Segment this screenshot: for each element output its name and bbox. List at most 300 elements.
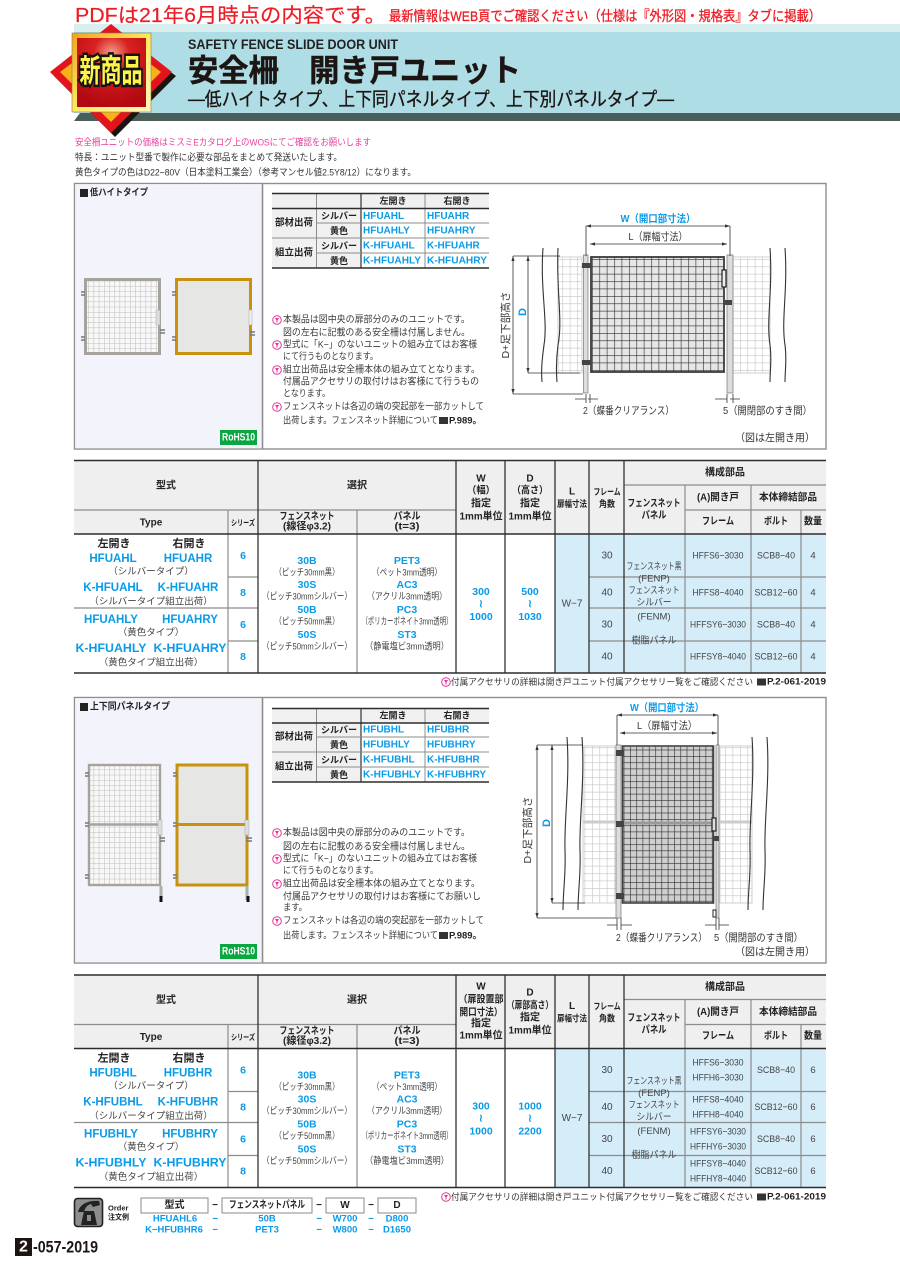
page number <box>15 1238 98 1256</box>
small model table: 部材出荷 <box>275 216 313 228</box>
order header boxes: − <box>368 1200 374 1211</box>
selection columns: （ペット3mm透明） <box>372 566 442 578</box>
selection columns: （静電塩ビ3mm透明） <box>365 1155 449 1167</box>
header labels: シリーズ <box>231 1032 255 1042</box>
header labels: 構成部品 <box>705 466 745 478</box>
order header boxes: − <box>316 1200 322 1211</box>
selection columns: 30S <box>298 579 316 591</box>
parts columns: フェンスネット黒 <box>626 1076 682 1087</box>
intro text: 特長：ユニット型番で製作に必要な部品をまとめて発送いたします。 <box>75 152 342 164</box>
size ranges: ≀ <box>479 1112 483 1124</box>
model column: （シルバータイプ） <box>108 1080 194 1092</box>
model column: （シルバータイプ組立出荷） <box>89 596 213 608</box>
order header boxes: フェンスネットパネル <box>229 1199 305 1211</box>
parts columns: 6 <box>810 1102 816 1113</box>
notes list <box>273 314 484 426</box>
small model table: HFUAHLY <box>363 226 410 236</box>
small model table: シルバー <box>321 241 357 251</box>
size ranges: 300 <box>472 586 490 598</box>
header labels: 角数 <box>599 1012 615 1024</box>
model column: 右開き <box>172 1050 206 1064</box>
header labels: (線径φ3.2) <box>283 520 331 532</box>
header labels: 指定 <box>520 496 540 510</box>
parts columns: SCB8−40 <box>757 1134 795 1145</box>
notes list: 組立出荷品は安全柵本体の組み立てとなります。 <box>283 364 480 376</box>
header labels: フェンスネット <box>280 1025 334 1037</box>
parts columns: 4 <box>810 588 816 598</box>
header labels: シリーズ <box>231 518 255 528</box>
small model table: K-HFUAHRY <box>427 256 487 266</box>
panel: low height type <box>74 184 826 449</box>
posts <box>584 255 733 393</box>
model column: K-HFUAHRY <box>154 643 227 655</box>
small model table: K-HFUAHL <box>363 240 415 252</box>
parts columns: (FENM) <box>637 612 671 622</box>
parts columns: 30 <box>601 550 613 562</box>
door mesh <box>622 746 714 903</box>
size ranges: 1030 <box>518 611 542 623</box>
selection columns: （ポリカーボネイト3mm透明） <box>362 616 452 628</box>
order header boxes: − <box>212 1200 218 1211</box>
header labels: フェンスネット <box>628 498 680 510</box>
parts columns: HFFHY8−4040 <box>690 1174 746 1184</box>
model column: K-HFUAHLY <box>76 643 147 655</box>
notes list: ます。 <box>283 902 307 914</box>
model column: （シルバータイプ） <box>108 566 194 578</box>
order header boxes <box>141 1198 416 1213</box>
selection columns: （ポリカーボネイト3mm透明） <box>362 1130 452 1142</box>
model column: HFUAHLY <box>84 614 138 626</box>
header labels: 型式 <box>156 993 176 1006</box>
panel: same upper and lower panel type <box>74 698 826 963</box>
intro text <box>75 136 416 178</box>
header labels: （扉設置部 <box>458 992 504 1006</box>
header labels: 扉幅寸法 <box>557 1012 587 1024</box>
selection columns: （ピッチ50mmシルバー） <box>262 640 352 652</box>
model column: 左開き <box>98 1050 130 1064</box>
header labels: （幅） <box>467 484 495 496</box>
parts columns: 30 <box>601 1065 613 1076</box>
model column: HFUAHL <box>89 553 137 565</box>
header labels: L <box>569 1001 575 1012</box>
header labels: 数量 <box>804 514 822 528</box>
notes list: 型式に「K−」のないユニットの組み立てはお客様 <box>283 338 477 350</box>
notice line: PDF date <box>75 4 821 27</box>
header labels: L <box>569 486 575 498</box>
selection columns: PC3 <box>397 604 417 616</box>
header labels: W <box>476 474 486 484</box>
small model table: K-HFUAHLY <box>363 256 421 266</box>
small model table: HFUBHRY <box>427 740 476 750</box>
size ranges: 2200 <box>518 1126 542 1138</box>
size ranges: 1000 <box>469 1126 493 1138</box>
door diagram: tall: D+足下部高さ <box>521 796 534 864</box>
small model table: シルバー <box>321 725 357 735</box>
page number: -057-2019 <box>33 1238 98 1256</box>
header labels: パネル <box>642 1024 666 1036</box>
parts columns: HFFSY8−4040 <box>690 652 746 662</box>
order example values: − <box>212 1224 218 1236</box>
title block: SAFETY FENCE SLIDE DOOR UNIT <box>188 36 398 52</box>
order example values: PET3 <box>255 1224 279 1236</box>
door diagram: tall: W（開口部寸法） <box>630 701 704 714</box>
header labels: パネル <box>394 1025 420 1037</box>
small model table: 部材出荷 <box>275 730 313 742</box>
selection columns: PET3 <box>394 1070 420 1082</box>
notes list: 本製品は図中央の扉部分のみのユニットです。 <box>283 314 470 326</box>
model column: HFUBHLY <box>84 1128 138 1140</box>
selection columns: AC3 <box>396 1094 418 1106</box>
selection columns: （アクリル3mm透明） <box>367 1105 447 1117</box>
small model table: 組立出荷 <box>275 760 313 772</box>
model column: HFUAHRY <box>162 614 218 626</box>
door diagram: low height: 5（開閉部のすき間） <box>723 405 812 417</box>
parts columns: SCB12−60 <box>754 1166 798 1177</box>
model column <box>76 536 246 668</box>
header labels: 1mm単位 <box>508 510 552 522</box>
selection columns: （ピッチ30mm黒） <box>274 566 340 578</box>
parts columns: (FENP) <box>638 574 670 584</box>
parts columns: 樹脂パネル <box>632 634 677 646</box>
model column: 8 <box>240 587 246 599</box>
size ranges: 1000 <box>469 611 493 623</box>
photo: silver fence door tall <box>85 765 165 902</box>
model column: 6 <box>240 619 246 631</box>
header labels: 指定 <box>520 1010 540 1024</box>
header labels: Type <box>140 518 163 528</box>
door diagram: tall: （図は左開き用） <box>735 945 815 958</box>
order example values: − <box>368 1214 374 1224</box>
header labels: (t=3) <box>394 1036 420 1047</box>
door diagram: low height <box>499 212 815 444</box>
RoHS badge: RoHS10 <box>222 946 255 958</box>
header labels: パネル <box>642 510 666 522</box>
parts columns: 6 <box>810 1065 816 1076</box>
notes list: 本製品は図中央の扉部分のみのユニットです。 <box>283 826 470 838</box>
parts columns: SCB12−60 <box>754 652 798 662</box>
model column: K-HFUBHR <box>158 1096 219 1108</box>
hinges and latch <box>616 750 719 899</box>
selection columns: ST3 <box>397 629 417 641</box>
small model table: HFUAHL <box>363 211 404 222</box>
model column: 6 <box>240 1064 246 1076</box>
small model table: K-HFUAHR <box>427 240 481 252</box>
header band <box>74 24 900 121</box>
door diagram: low height: （図は左開き用） <box>735 431 815 444</box>
notes list: P.989。 <box>449 416 482 426</box>
notes list: 付属品アクセサリの取付けはお客様にてお願いし <box>283 890 481 902</box>
parts columns: SCB8−40 <box>757 620 795 630</box>
model column: （シルバータイプ組立出荷） <box>89 1110 213 1122</box>
size ranges: 500 <box>521 586 539 598</box>
notes list: 付属品アクセサリの取付けはお客様にて行うもの <box>283 376 479 388</box>
notice line: PDF date: PDFは21年6月時点の内容です。 <box>75 4 386 27</box>
selection columns: ST3 <box>397 1144 417 1156</box>
door diagram: tall: L（扉幅寸法） <box>637 719 697 732</box>
title block: —低ハイトタイプ、上下同パネルタイプ、上下別パネルタイプ— <box>188 88 674 110</box>
parts columns <box>601 550 816 662</box>
selection columns: （ピッチ30mmシルバー） <box>262 590 352 602</box>
order example values: − <box>368 1224 374 1236</box>
small model table: 黄色 <box>330 225 348 236</box>
small model table: 右開き <box>443 710 471 720</box>
parts columns: 6 <box>810 1166 816 1177</box>
header labels <box>140 466 822 532</box>
header labels: 構成部品 <box>705 980 745 993</box>
small model table: HFUBHR <box>427 724 470 736</box>
notes list: にて行うものとなります。 <box>283 864 378 876</box>
model column: K-HFUAHR <box>158 582 219 594</box>
header labels: フレーム <box>702 1030 734 1042</box>
door diagram: tall: D <box>541 819 553 827</box>
door diagram: tall: 2（蝶番クリアランス） <box>616 931 707 944</box>
order header boxes: D <box>393 1200 401 1211</box>
header labels: 指定 <box>471 496 491 510</box>
parts columns: 40 <box>601 652 613 662</box>
small model table: HFUBHLY <box>363 740 410 750</box>
order label: 注文例 <box>108 1212 129 1222</box>
order example values: D1650 <box>383 1224 411 1236</box>
selection columns <box>262 555 452 652</box>
size ranges <box>469 1100 583 1138</box>
selection columns: （ピッチ30mmシルバー） <box>262 1105 352 1117</box>
header labels: (A)開き戸 <box>697 1006 739 1018</box>
small model table: 組立出荷 <box>275 246 313 258</box>
parts columns: HFFSY6−3030 <box>690 1126 746 1138</box>
icon: telephone <box>74 1198 102 1226</box>
model column: （黄色タイプ組立出荷） <box>99 1171 203 1183</box>
model column: （黄色タイプ） <box>118 1141 184 1153</box>
photo: yellow panel door tall <box>173 765 252 902</box>
selection columns: （ペット3mm透明） <box>372 1081 442 1093</box>
selection columns: （静電塩ビ3mm透明） <box>365 640 449 652</box>
header labels: パネル <box>394 510 420 522</box>
table footnote 2: P.2-061-2019 <box>767 1192 826 1202</box>
header labels: 扉幅寸法 <box>557 498 587 509</box>
header labels: （高さ） <box>512 484 548 496</box>
notes list: 出荷します。フェンスネット詳細について <box>283 930 438 942</box>
selection columns: 30S <box>298 1094 316 1106</box>
header labels: 数量 <box>804 1029 822 1042</box>
model column: 6 <box>240 550 246 562</box>
spec table: same panel type <box>74 974 826 1188</box>
left and right background fence <box>542 248 786 382</box>
parts columns: フェンスネット <box>628 586 680 596</box>
door diagram: low height: 2（蝶番クリアランス） <box>583 404 674 417</box>
order example <box>74 1198 416 1236</box>
parts columns: フェンスネット <box>628 1100 680 1111</box>
order example values <box>145 1214 411 1236</box>
header labels: フェンスネット <box>628 1012 680 1024</box>
header labels: フレーム <box>702 516 734 528</box>
small model table: HFUAHRY <box>427 226 476 236</box>
header labels: (t=3) <box>394 522 420 532</box>
photo: silver fence door <box>81 280 165 354</box>
header labels: ボルト <box>764 1030 788 1042</box>
small model table: 左開き <box>379 195 407 206</box>
selection columns <box>262 1070 452 1167</box>
parts columns: HFFSY6−3030 <box>690 620 746 630</box>
parts columns: 4 <box>810 652 816 662</box>
hinges and latch <box>582 263 732 365</box>
header labels: 開口寸法） <box>460 1006 502 1018</box>
table footnote 1: 付属アクセサリの詳細は開き戸ユニット付属アクセサリー覧をご確認ください <box>451 676 753 687</box>
small model table: K-HFUBHLY <box>363 770 421 780</box>
parts columns: SCB12−60 <box>754 588 798 598</box>
panel heading: 上下同パネルタイプ <box>90 700 170 712</box>
selection columns: PET3 <box>394 555 420 567</box>
title block: 安全柵 開き戸ユニット <box>188 54 521 88</box>
parts columns: 40 <box>601 588 613 598</box>
size ranges: ≀ <box>479 598 483 610</box>
header labels: フレーム <box>594 1002 620 1012</box>
photo: yellow panel door <box>172 280 255 354</box>
size ranges: W−7 <box>562 598 583 610</box>
order label <box>108 1204 129 1222</box>
order example values: − <box>316 1224 322 1236</box>
header labels <box>140 980 822 1047</box>
model column: 8 <box>240 1102 246 1114</box>
header labels: W <box>476 982 486 992</box>
size ranges: ≀ <box>528 1112 532 1124</box>
model column: 右開き <box>172 536 206 550</box>
header labels: 1mm単位 <box>460 1028 502 1042</box>
door diagram: low height: D <box>517 308 529 316</box>
RoHS badge <box>220 430 257 445</box>
size ranges <box>469 586 583 623</box>
selection columns: PC3 <box>397 1118 417 1130</box>
order example values: − <box>316 1214 322 1224</box>
parts columns: シルバー <box>636 598 672 608</box>
parts columns: 30 <box>601 620 613 630</box>
left and right background fence <box>563 737 768 910</box>
parts columns: 40 <box>601 1102 613 1113</box>
small model table: シルバー <box>321 211 357 221</box>
parts columns: 6 <box>810 1134 816 1145</box>
intro text: 安全柵ユニットの価格はミスミEカタログ上のWOSにてご確認をお願いします <box>75 136 371 148</box>
parts columns: SCB8−40 <box>757 550 795 562</box>
selection columns: 30B <box>297 555 317 567</box>
table footnote 1: P.2-061-2019 <box>767 676 826 688</box>
header labels: フレーム <box>594 487 620 497</box>
dimension lines <box>513 226 740 403</box>
notes list: 組立出荷品は安全柵本体の組み立てとなります。 <box>283 878 480 890</box>
header labels: 1mm単位 <box>508 1024 552 1036</box>
selection columns: （ピッチ30mm黒） <box>274 1081 340 1093</box>
parts columns: 30 <box>601 1134 613 1145</box>
parts columns: 40 <box>601 1166 613 1177</box>
selection columns: （ピッチ50mm黒） <box>274 616 340 628</box>
parts columns: HFFH8−4040 <box>692 1110 744 1120</box>
header labels: 本体締結部品 <box>759 1005 817 1018</box>
header labels: 指定 <box>471 1016 491 1030</box>
size ranges: 300 <box>472 1100 490 1112</box>
model column: 6 <box>240 1134 246 1146</box>
size ranges: W−7 <box>562 1113 583 1124</box>
door diagram: tall <box>521 701 815 958</box>
small model table: シルバー <box>321 755 357 765</box>
small model table: HFUAHR <box>427 211 470 222</box>
parts columns: (FENP) <box>638 1088 670 1099</box>
spec table: low height type <box>74 460 826 673</box>
order example values: W800 <box>333 1224 357 1236</box>
parts columns: HFFS8−4040 <box>692 1094 744 1106</box>
header labels: (A)開き戸 <box>697 492 739 504</box>
door diagram: tall: 5（開閉部のすき間） <box>714 932 803 944</box>
small model table: 黄色 <box>330 255 348 266</box>
panel heading: 低ハイトタイプ <box>90 186 148 198</box>
notes list: 図の左右に記載のある安全柵は付属しません。 <box>283 840 470 852</box>
order label: Order <box>108 1204 129 1212</box>
small model table <box>272 193 489 268</box>
parts columns: シルバー <box>636 1112 672 1123</box>
order example values: K−HFUBHR6 <box>145 1224 203 1236</box>
header labels: フェンスネット <box>280 510 334 522</box>
selection columns: （ピッチ50mm黒） <box>274 1130 340 1142</box>
parts columns: 樹脂パネル <box>632 1149 677 1161</box>
header labels: D <box>526 474 534 484</box>
parts columns: HFFS8−4040 <box>692 588 744 598</box>
notice line: PDF date: 最新情報はWEB頁でご確認ください（仕様は『外形図・規格表』タブに掲載） <box>389 8 821 24</box>
title block <box>188 36 674 110</box>
model column: K-HFUAHL <box>83 582 143 594</box>
model column: K-HFUBHRY <box>154 1158 227 1170</box>
order example values: HFUAHL6 <box>153 1214 197 1224</box>
door diagram: low height: W（開口部寸法） <box>620 212 696 225</box>
parts columns: 4 <box>810 620 816 630</box>
order example values: − <box>212 1214 218 1224</box>
posts <box>616 745 719 918</box>
header labels: 選択 <box>347 478 367 492</box>
model column: K-HFUBHL <box>83 1096 143 1108</box>
parts columns: HFFS6−3030 <box>692 1058 744 1068</box>
small model table: 右開き <box>443 195 471 206</box>
notes list: 図の左右に記載のある安全柵は付属しません。 <box>283 326 470 338</box>
order example values: W700 <box>333 1214 357 1224</box>
notes list: フェンスネットは各辺の端の突起部を一部カットして <box>283 400 484 412</box>
selection columns: 30B <box>297 1070 317 1082</box>
header labels: 型式 <box>156 478 176 492</box>
small model table: HFUBHL <box>363 724 404 736</box>
selection columns: 50B <box>297 604 317 616</box>
header labels: ボルト <box>764 516 788 528</box>
small model table: 左開き <box>379 710 407 720</box>
small model table <box>272 708 489 782</box>
header labels: D <box>526 988 534 998</box>
selection columns: AC3 <box>396 579 418 591</box>
door diagram: low height: L（扉幅寸法） <box>628 230 688 243</box>
small model table: K-HFUBHR <box>427 754 481 766</box>
notes list: 型式に「K−」のないユニットの組み立てはお客様 <box>283 852 477 864</box>
intro text: 黄色タイプの色はD22−80V（日本塗料工業会）（参考マンセル値2.5Y8/12）になります。 <box>75 166 416 178</box>
header labels: 1mm単位 <box>460 510 502 522</box>
parts columns: 4 <box>810 550 816 562</box>
model column: 8 <box>240 651 246 663</box>
selection columns: （ピッチ50mmシルバー） <box>262 1155 352 1167</box>
notes list: 出荷します。フェンスネット詳細について <box>283 414 438 426</box>
order header boxes: W <box>340 1200 350 1211</box>
model column: （黄色タイプ） <box>118 626 184 638</box>
header labels: 本体締結部品 <box>759 490 817 504</box>
parts columns: フェンスネット黒 <box>626 562 682 572</box>
parts columns: HFFHY6−3030 <box>690 1142 746 1152</box>
parts columns: HFFSY8−4040 <box>690 1158 746 1170</box>
parts columns: HFFS6−3030 <box>692 550 744 562</box>
new product badge: 新商品 <box>80 53 142 89</box>
small model table: K-HFUBHRY <box>427 770 486 780</box>
order example values: 50B <box>258 1214 276 1224</box>
RoHS badge: RoHS10 <box>222 432 255 444</box>
